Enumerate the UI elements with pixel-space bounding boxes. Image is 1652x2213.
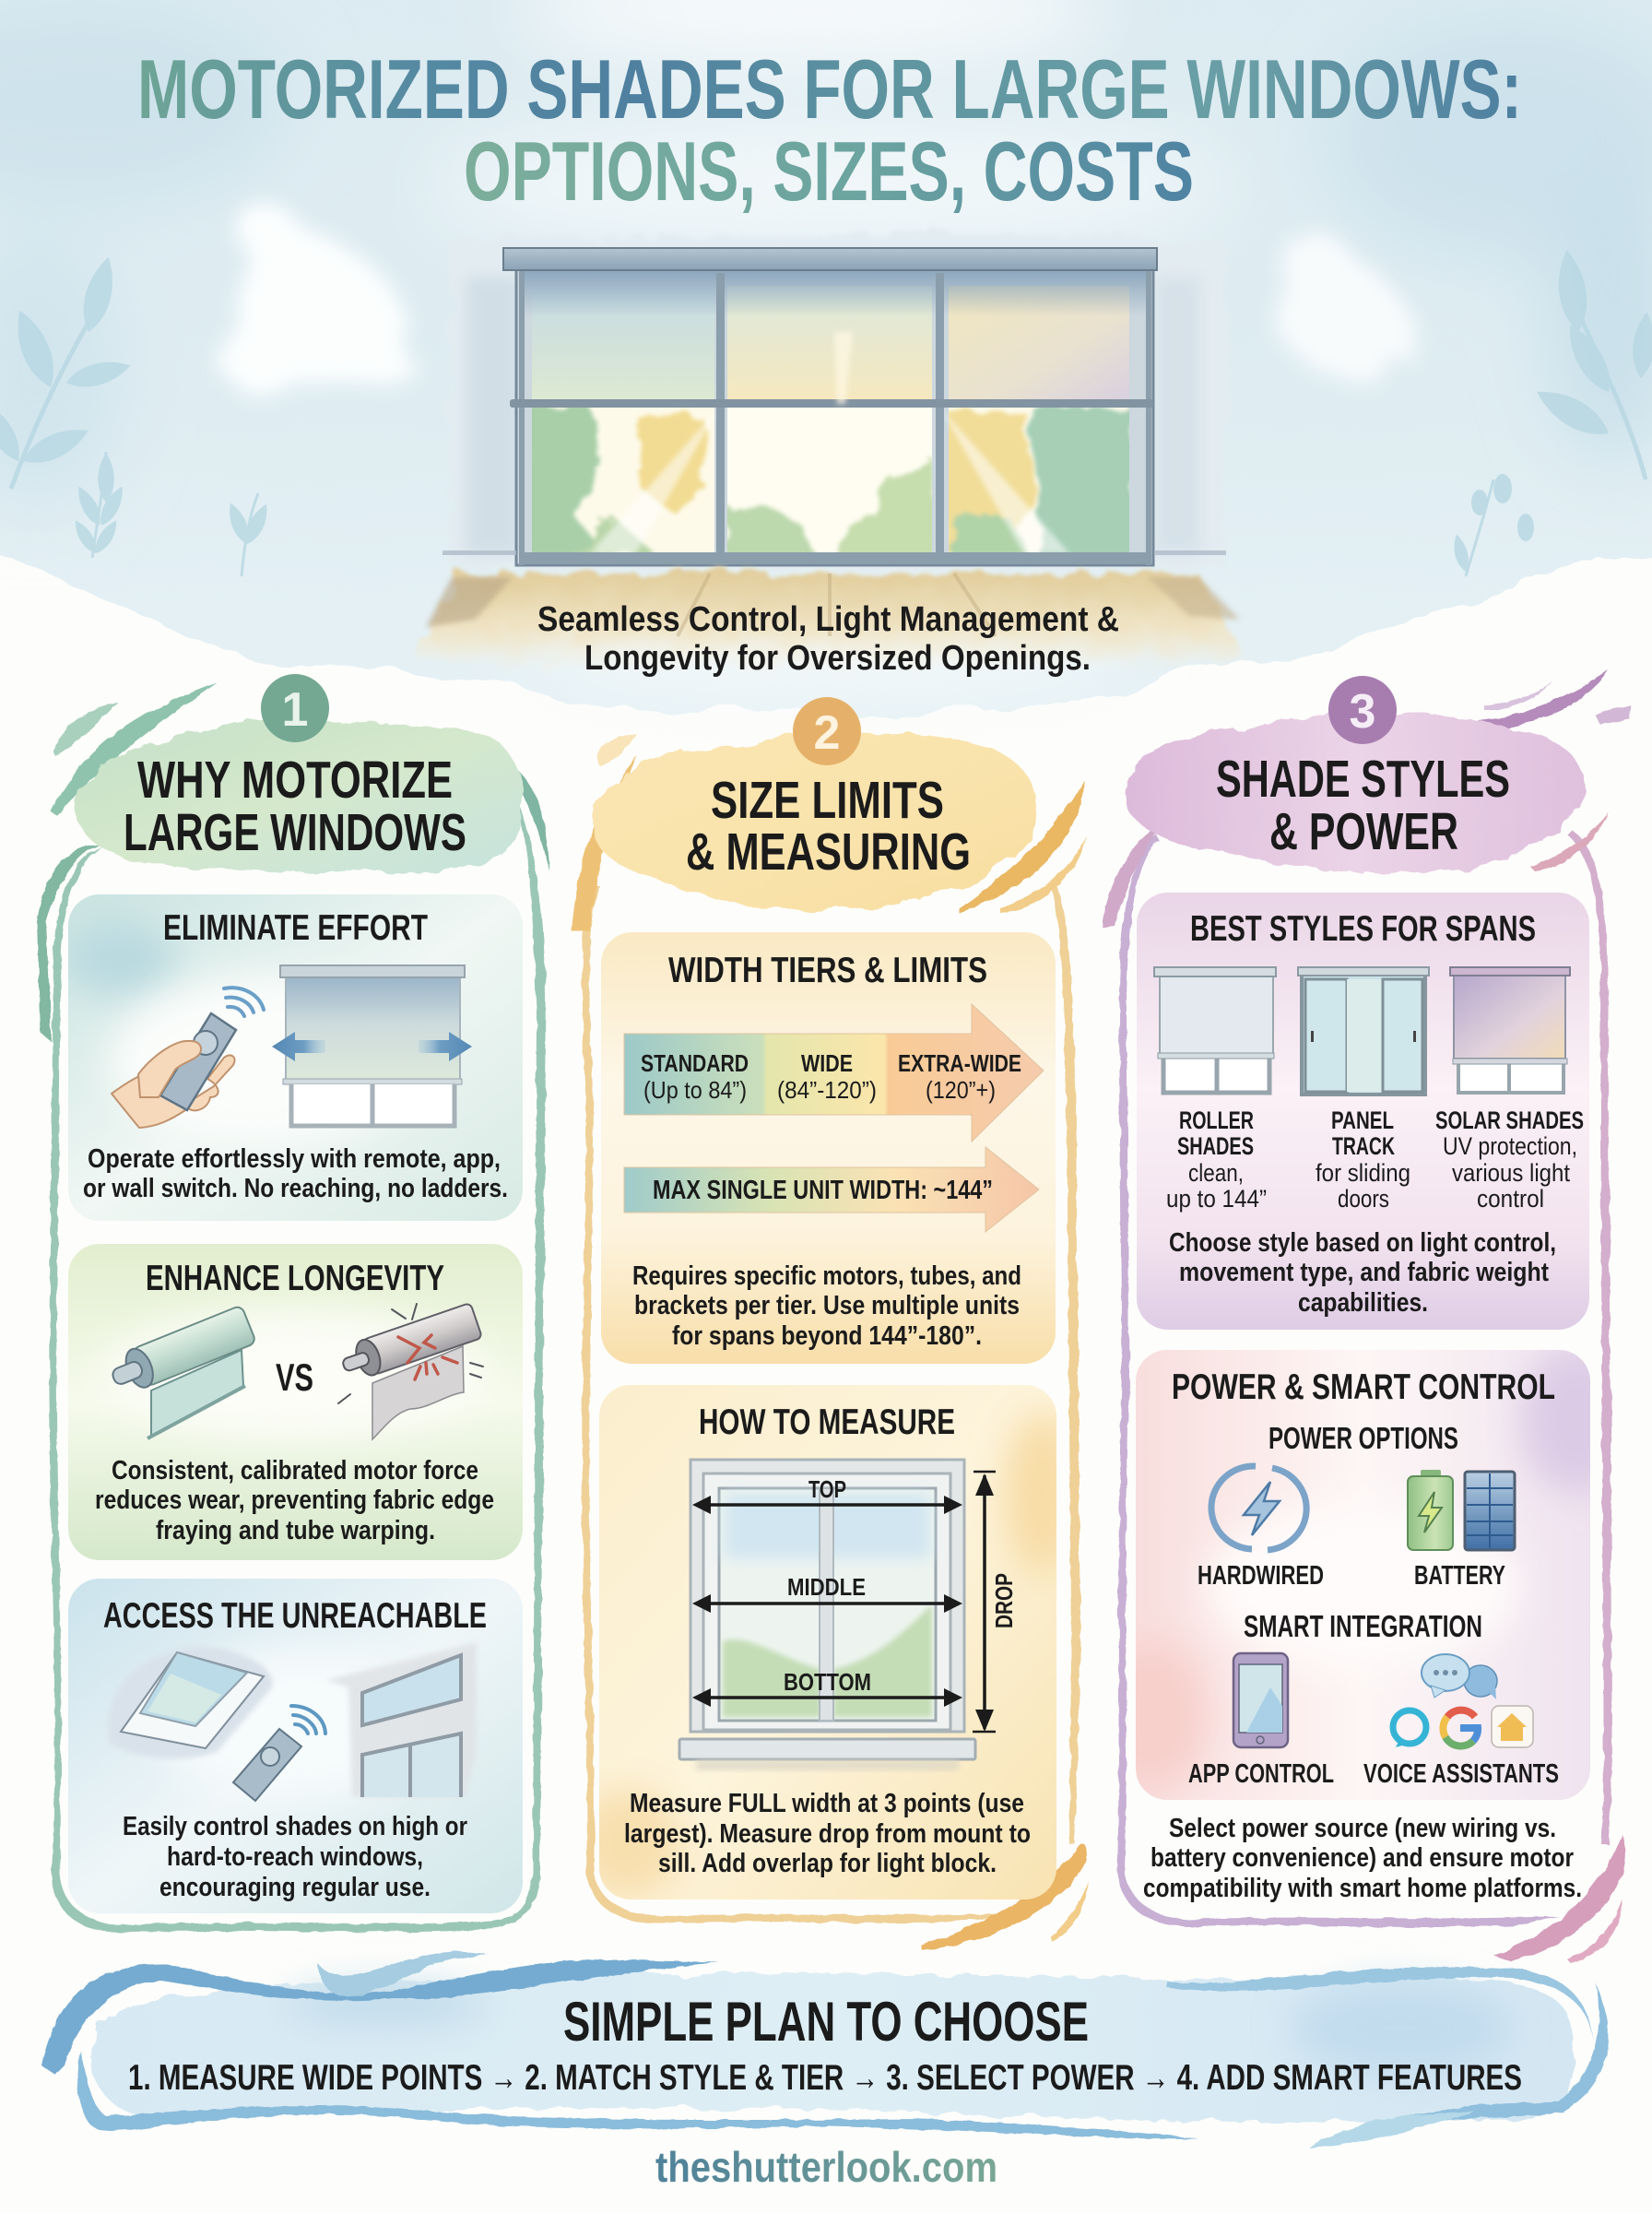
column heading: & MEASURING xyxy=(686,822,971,882)
style labels: UV protection, xyxy=(1443,1132,1577,1160)
card text xyxy=(83,1144,508,1203)
panel: why motorize large windows xyxy=(37,674,549,1933)
icon: shade widening xyxy=(272,965,472,1126)
column heading xyxy=(686,771,971,882)
style labels: ROLLER xyxy=(1179,1106,1254,1134)
icon: roller shade xyxy=(1154,967,1276,1093)
arrow: width tiers: EXTRA-WIDE xyxy=(898,1049,1021,1077)
card: width tiers and limits xyxy=(601,932,1056,1364)
website credit: theshutterlook.com xyxy=(655,2143,997,2191)
arrow: width tiers: WIDE xyxy=(801,1049,853,1077)
card text: encouraging regular use. xyxy=(159,1873,431,1902)
panel: shade styles and power xyxy=(1097,670,1632,1964)
column outline brush strokes xyxy=(1102,670,1632,1964)
style labels: up to 144” xyxy=(1166,1185,1267,1213)
column outline brush strokes xyxy=(37,682,549,1933)
icon: hardwired xyxy=(1211,1466,1306,1550)
icon: remote with signal xyxy=(233,1706,325,1801)
style labels: TRACK xyxy=(1332,1132,1395,1160)
number badge 2: 2 xyxy=(814,706,840,760)
number badge 1: 1 xyxy=(282,683,308,737)
icon: battery and solar panel xyxy=(1408,1470,1515,1550)
number badge 3: 3 xyxy=(1350,685,1375,739)
card: how to measure xyxy=(572,1385,1079,1899)
column heading: SHADE STYLES xyxy=(1216,750,1510,809)
banner wash xyxy=(91,1973,1574,2122)
column heading: SIZE LIMITS xyxy=(711,771,944,830)
card: eliminate effort xyxy=(65,894,523,1221)
icon: high windows xyxy=(326,1642,477,1797)
label: voice assistants: VOICE ASSISTANTS xyxy=(1363,1759,1559,1789)
card text: sill. Add overlap for light block. xyxy=(658,1849,997,1878)
card: enhance longevity xyxy=(68,1244,523,1560)
column summary text: compatibility with smart home platforms. xyxy=(1143,1874,1582,1903)
style labels: clean, xyxy=(1188,1159,1244,1187)
card heading: ACCESS THE UNREACHABLE xyxy=(103,1596,487,1636)
icon: voice chat bubbles and assistants xyxy=(1393,1654,1533,1747)
column summary text: Select power source (new wiring vs. xyxy=(1169,1814,1556,1843)
style labels: doors xyxy=(1338,1185,1389,1213)
subtitle xyxy=(537,600,1119,678)
column heading xyxy=(1216,750,1510,861)
arrow: max single unit width xyxy=(624,1147,1039,1232)
card text xyxy=(95,1456,494,1545)
subheading: power options: POWER OPTIONS xyxy=(1268,1421,1458,1455)
number badge 1 xyxy=(261,674,329,742)
arrow: width tiers: STANDARD xyxy=(641,1049,749,1077)
card text xyxy=(632,1261,1021,1351)
style labels: for sliding xyxy=(1316,1159,1410,1187)
icon: hand with remote xyxy=(112,988,264,1128)
card text: for spans beyond 144”-180”. xyxy=(672,1321,982,1351)
header watercolor wash xyxy=(0,0,1652,715)
card text: fraying and tube warping. xyxy=(156,1516,435,1545)
column outline brush strokes xyxy=(572,733,1088,1950)
diagram: window with measuring arrows: BOTTOM xyxy=(784,1668,871,1696)
column header blob xyxy=(593,733,1035,911)
card text: Operate effortlessly with remote, app, xyxy=(88,1144,501,1174)
subtitle: Longevity for Oversized Openings. xyxy=(584,639,1091,678)
column summary text xyxy=(1143,1814,1582,1903)
botanical leaves right xyxy=(1450,248,1652,576)
banner heading: SIMPLE PLAN TO CHOOSE xyxy=(563,1991,1089,2053)
style labels: SHADES xyxy=(1177,1132,1254,1160)
column heading xyxy=(124,751,466,862)
style labels: SOLAR SHADES xyxy=(1435,1106,1584,1134)
label: battery: BATTERY xyxy=(1414,1561,1505,1591)
card: access the unreachable xyxy=(68,1579,523,1913)
icon: panel track xyxy=(1298,967,1429,1095)
card text: or wall switch. No reaching, no ladders. xyxy=(83,1174,508,1203)
hero illustration: large window with roller shade xyxy=(415,232,1245,673)
arrow: width tiers: (84”-120”) xyxy=(777,1076,877,1104)
subheading: smart integration: SMART INTEGRATION xyxy=(1244,1609,1482,1643)
card text: Choose style based on light control, xyxy=(1169,1228,1556,1258)
card text: hard-to-reach windows, xyxy=(167,1842,423,1872)
diagram: window with measuring arrows: DROP xyxy=(990,1573,1018,1628)
arrow: width tiers: (120”+) xyxy=(926,1076,996,1104)
card text: brackets per tier. Use multiple units xyxy=(634,1291,1020,1320)
column header blob xyxy=(77,720,522,873)
arrow: width tiers xyxy=(624,1004,1044,1142)
panel: size limits and measuring xyxy=(572,697,1088,1950)
column heading: LARGE WINDOWS xyxy=(124,803,466,862)
arrow: width tiers: (Up to 84”) xyxy=(643,1076,747,1104)
style labels xyxy=(1166,1106,1584,1213)
style labels: PANEL xyxy=(1331,1106,1394,1134)
card text: capabilities. xyxy=(1298,1288,1428,1318)
title: OPTIONS, SIZES, COSTS xyxy=(464,125,1194,219)
card text: largest). Measure drop from mount to xyxy=(624,1819,1031,1849)
banner brush strokes xyxy=(41,1951,1608,2148)
banner: simple plan to choose xyxy=(41,1951,1608,2148)
card heading: ELIMINATE EFFORT xyxy=(163,908,428,948)
diagram: window with measuring arrows: MIDDLE xyxy=(787,1573,866,1601)
card text: Easily control shades on high or xyxy=(123,1812,467,1841)
icon: phone xyxy=(1233,1653,1288,1747)
style labels: various light xyxy=(1452,1159,1570,1187)
card text xyxy=(123,1812,467,1902)
card text: Requires specific motors, tubes, and xyxy=(632,1261,1021,1291)
card heading: WIDTH TIERS & LIMITS xyxy=(668,951,987,990)
label: app control: APP CONTROL xyxy=(1188,1759,1334,1789)
column heading: WHY MOTORIZE xyxy=(137,751,453,810)
number badge 2 xyxy=(793,697,861,765)
card heading: HOW TO MEASURE xyxy=(699,1402,955,1442)
number badge 3 xyxy=(1328,676,1397,744)
column heading: & POWER xyxy=(1269,802,1458,861)
subtitle: Seamless Control, Light Management & xyxy=(537,600,1119,639)
card: best styles for spans xyxy=(1137,893,1589,1330)
card heading: BEST STYLES FOR SPANS xyxy=(1190,909,1536,949)
column summary text: battery convenience) and ensure motor xyxy=(1150,1843,1574,1873)
botanical leaves left xyxy=(0,254,273,576)
card text: movement type, and fabric weight xyxy=(1179,1258,1549,1287)
icon: healthy roller xyxy=(106,1305,256,1438)
card text: Measure FULL width at 3 points (use xyxy=(630,1789,1024,1818)
card heading: ENHANCE LONGEVITY xyxy=(146,1259,444,1298)
diagram: window with measuring arrows xyxy=(679,1460,1018,1770)
title xyxy=(137,43,1522,219)
diagram: window with measuring arrows: TOP xyxy=(808,1475,846,1503)
style labels: control xyxy=(1477,1185,1544,1213)
card text: Consistent, calibrated motor force xyxy=(112,1456,478,1485)
icon: solar shade xyxy=(1450,967,1570,1093)
column header blob xyxy=(1126,714,1585,872)
card: power and smart control xyxy=(1136,1350,1590,1800)
card text: reduces wear, preventing fabric edge xyxy=(95,1485,494,1515)
arrow: max single unit width: MAX SINGLE UNIT WIDTH: ~144” xyxy=(653,1176,993,1205)
icon: worn roller xyxy=(337,1303,483,1439)
label: hardwired: HARDWIRED xyxy=(1198,1561,1324,1591)
label: vs: VS xyxy=(276,1355,313,1399)
icon: skylight xyxy=(108,1646,273,1758)
card text xyxy=(1169,1228,1556,1318)
card text xyxy=(624,1789,1031,1878)
